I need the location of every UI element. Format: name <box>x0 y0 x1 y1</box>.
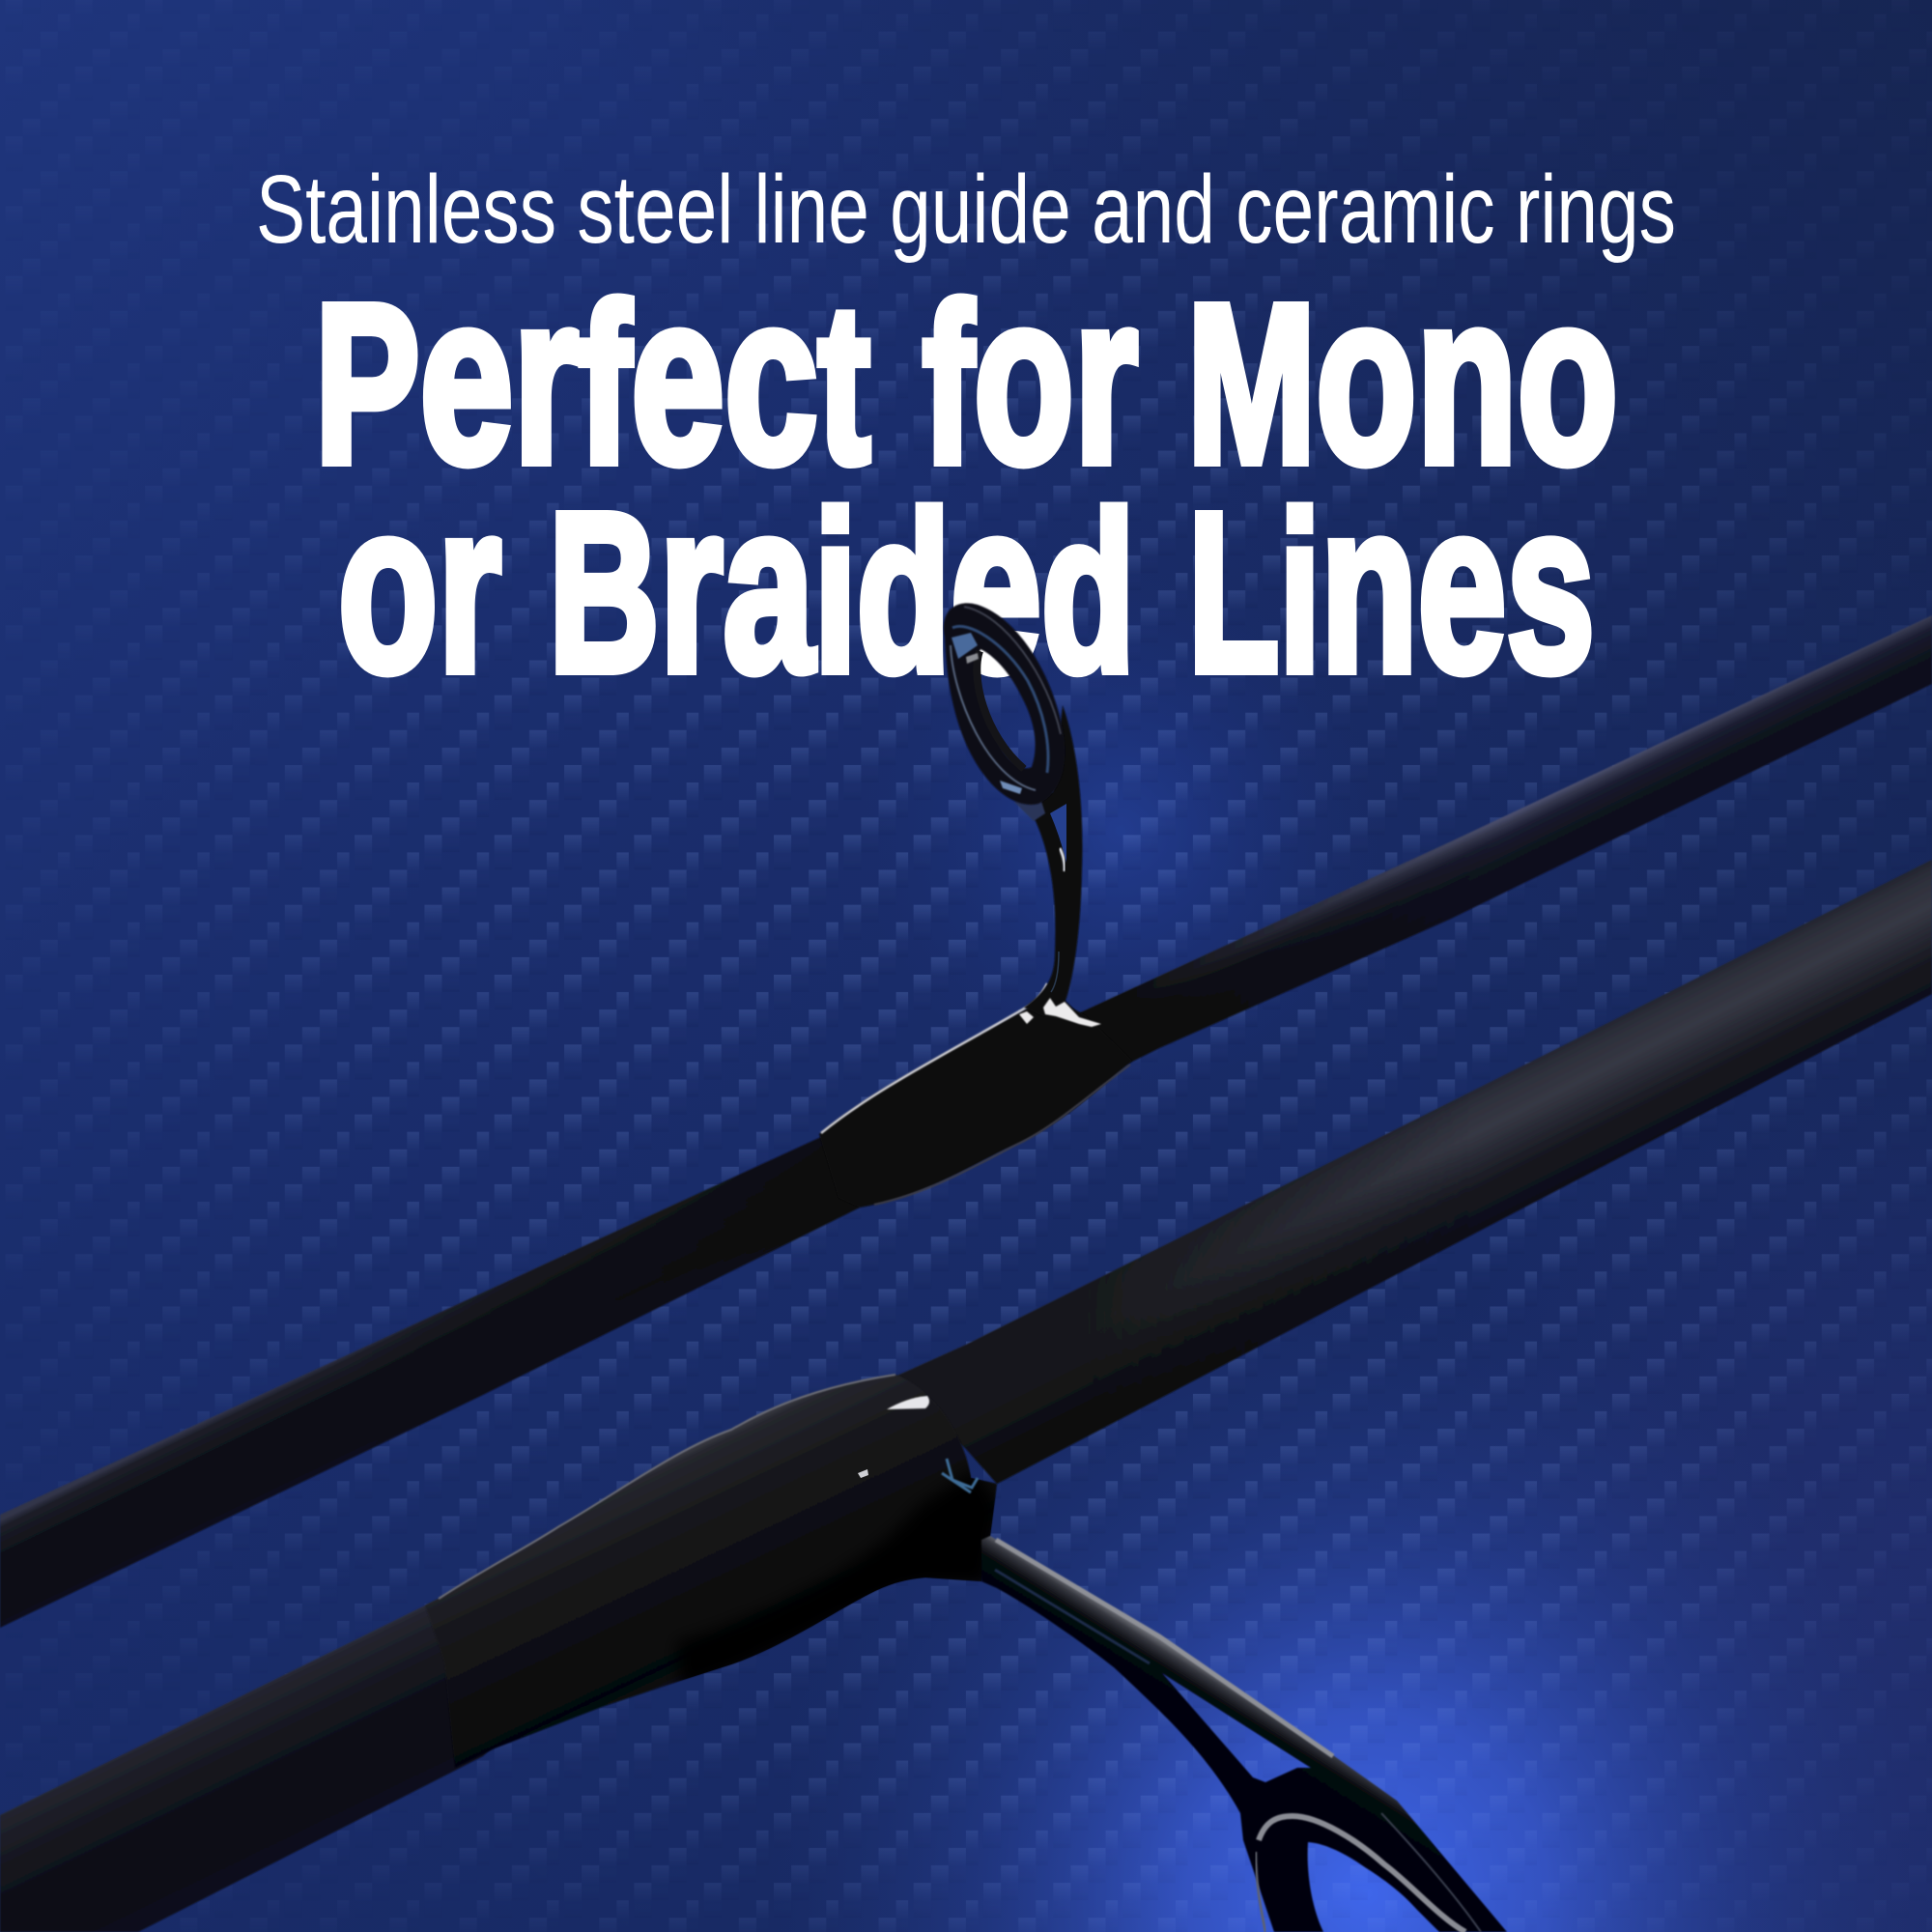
lower rod: left shaft <box>0 1571 522 1932</box>
second guide: ring highlights <box>995 1540 1481 1932</box>
heading line 2 <box>338 452 1595 722</box>
lower rod: thread wrap <box>425 1375 1000 1768</box>
guide frame <box>1014 705 1082 1016</box>
heading line 1: Mono <box>1187 243 1618 513</box>
heading line 1: Perfect <box>315 243 870 513</box>
heading line 2: Braided <box>549 452 1135 722</box>
heading line 2: or <box>338 452 501 722</box>
lower rod: right shaft <box>889 860 1932 1484</box>
upper rod: left shaft <box>0 1136 860 1628</box>
heading line 1 <box>315 243 1618 513</box>
upper rod: thread wrap <box>819 983 1132 1208</box>
guide ring <box>944 603 1065 805</box>
heading line 2: Lines <box>1188 452 1595 722</box>
heading <box>315 243 1618 722</box>
upper rod: right shaft <box>1072 615 1932 1072</box>
second guide: struts and ring frame <box>981 1536 1507 1932</box>
heading line 1: for <box>923 243 1138 513</box>
upper fishing rod with guide <box>0 603 1932 1628</box>
lower fishing rod with guide <box>0 860 1932 1932</box>
guide foot highlights <box>1019 998 1101 1027</box>
